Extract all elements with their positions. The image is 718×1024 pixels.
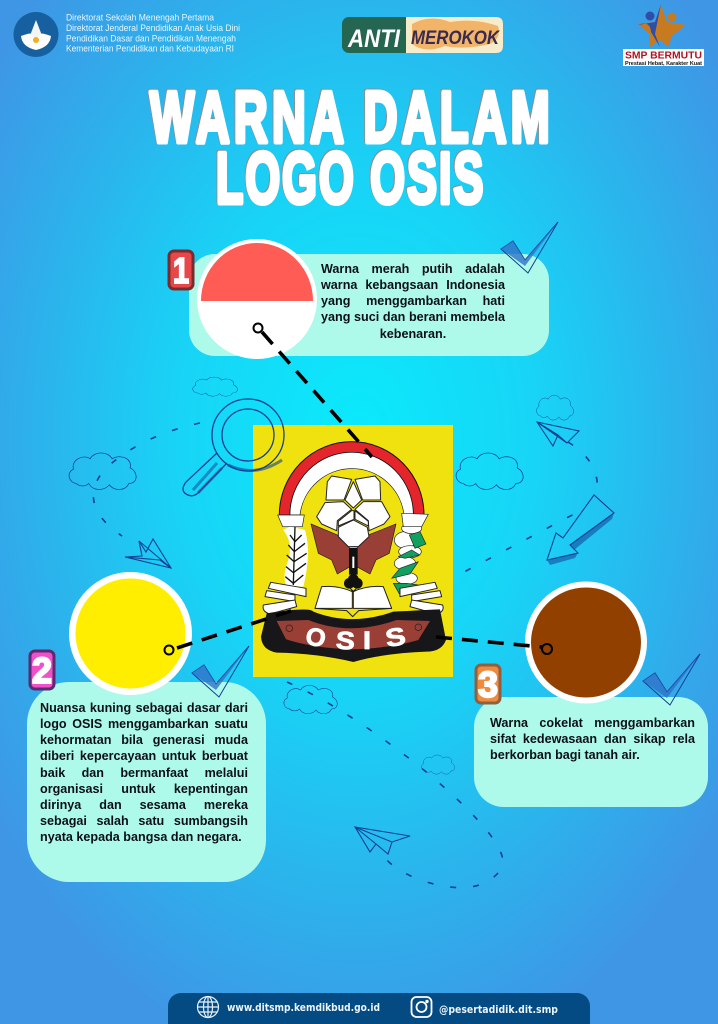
- title: LOGO OSIS: [216, 138, 483, 219]
- panel 2 text: dirinya dan sesama mereka: [40, 798, 248, 812]
- ministry text: Kementerian Pendidikan dan Kebudayaan RI: [66, 44, 234, 54]
- panel 1 text: kebenaran.: [380, 327, 446, 341]
- panel 2 text: Nuansa kuning sebagai dasar dari: [40, 701, 248, 715]
- icon: instagram: [412, 997, 432, 1017]
- arch: [279, 442, 424, 515]
- panel 2 text: diberi kepercayaan untuk berbuat: [40, 749, 248, 763]
- flower lower petal: [338, 520, 369, 547]
- flower: [317, 476, 390, 531]
- panel 1 text: yang suci dan berani membela: [321, 310, 505, 324]
- wheat: [283, 527, 308, 587]
- panel 2 text: kehormatan bila generasi muda: [40, 733, 248, 747]
- SMP Bermutu logo: [623, 4, 704, 67]
- website: www.ditsmp.kemdikbud.go.id: [227, 1001, 380, 1014]
- pen: [344, 548, 363, 593]
- logo lettering: O: [303, 622, 328, 654]
- title: LOGO OSIS: [215, 137, 482, 218]
- footer bar: [168, 993, 590, 1024]
- column caps: [278, 513, 428, 527]
- logo lettering: [303, 622, 408, 656]
- panel 2 text: sebagai salah satu sumbangsih: [40, 814, 248, 828]
- ministry text: Direktorat Jenderal Pendidikan Anak Usia Dini: [66, 23, 240, 33]
- panel 2 background: [27, 682, 266, 882]
- number badges: 1: [173, 250, 189, 291]
- number badges: 3: [478, 664, 498, 705]
- panel 3 text: sifat kedewasaan dan sikap rela: [490, 732, 695, 746]
- logo lettering: I: [363, 627, 371, 655]
- book: [315, 586, 392, 617]
- cotton: [392, 523, 426, 595]
- icon: globe: [198, 996, 218, 1018]
- panel 2 text: logo OSIS menggambarkan suatu: [40, 717, 248, 731]
- panel 3 text: Warna cokelat menggambarkan: [490, 716, 695, 730]
- anti merokok badge: ANTI: [347, 25, 401, 53]
- ministry text: [66, 12, 240, 54]
- panel 3 text: [490, 716, 696, 762]
- SMP Bermutu logo: Prestasi Hebat, Karakter Kuat: [625, 61, 702, 67]
- number badges: 2: [32, 650, 52, 691]
- logo lettering: S: [383, 622, 408, 653]
- ribbon: [261, 609, 446, 662]
- panel 2 text: nyata kepada bangsa dan negara.: [40, 830, 242, 844]
- title: WARNA DALAM: [150, 77, 550, 157]
- ministry logo: [14, 12, 58, 57]
- scroll bands: [263, 582, 443, 614]
- panel 1 text: [321, 262, 506, 341]
- panel 3 background: [474, 697, 708, 807]
- title: WARNA DALAM: [149, 76, 549, 156]
- panel 2 text: baik dan bermanfaat melalui: [40, 766, 248, 780]
- panel 3 text: berkorban bagi tanah air.: [490, 748, 640, 762]
- ministry text: Pendidikan Dasar dan Pendidikan Menengah: [66, 34, 236, 44]
- ministry text: Direktorat Sekolah Menengah Pertama: [66, 12, 214, 22]
- panel 2 text: [40, 701, 248, 844]
- panel 1 text: Warna merah putih adalah: [321, 262, 505, 276]
- hands: [311, 524, 396, 574]
- anti merokok badge: [342, 17, 503, 53]
- panel 1 text: yang menggambarkan hati: [321, 294, 505, 308]
- SMP Bermutu logo: SMP BERMUTU: [625, 50, 702, 62]
- panel 1 background: [189, 254, 549, 356]
- logo lettering: S: [335, 627, 356, 656]
- panel 2 text: organisasi untuk kepentingan: [40, 782, 248, 796]
- title: [149, 76, 550, 219]
- panel 1 text: warna kebangsaan Indonesia: [321, 278, 505, 292]
- anti merokok badge: MEROKOK: [411, 28, 500, 49]
- instagram handle: @pesertadidik.dit.smp: [439, 1003, 558, 1016]
